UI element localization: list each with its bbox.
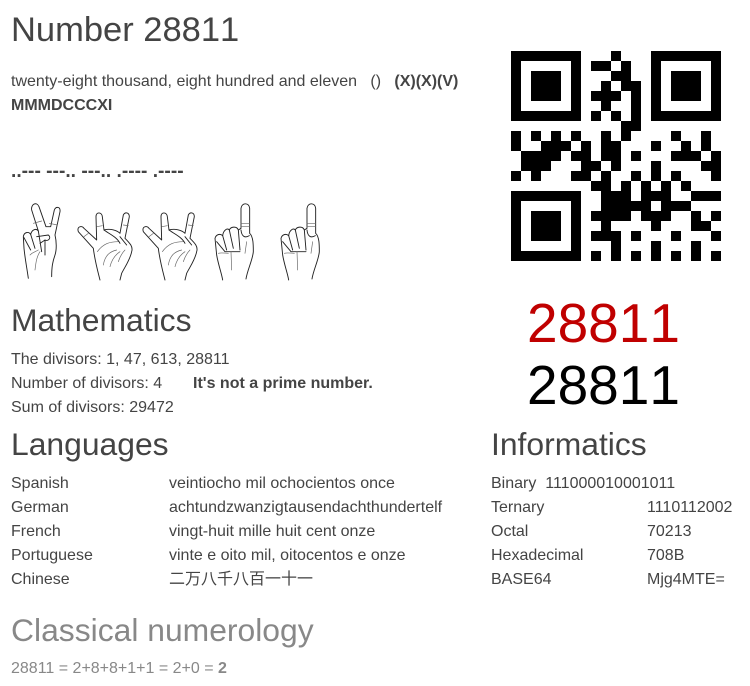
informatics table: 708B bbox=[647, 547, 684, 564]
informatics table: Octal bbox=[491, 523, 528, 540]
number in words and roman numeral: MMMDCCCXI bbox=[11, 97, 112, 114]
heading: Classical numerology: Classical numerology bbox=[11, 612, 314, 648]
red number image: 28811 bbox=[527, 292, 680, 354]
hand: one bbox=[281, 204, 319, 280]
languages table: Spanish bbox=[11, 475, 69, 492]
informatics table: Binary 111000010001011 bbox=[491, 475, 675, 492]
languages table bbox=[11, 475, 442, 588]
informatics table: BASE64 bbox=[491, 571, 551, 588]
mathematics facts: It's not a prime number. bbox=[193, 375, 373, 392]
QR code bbox=[511, 51, 721, 261]
heading: Informatics: Informatics bbox=[491, 426, 647, 462]
mathematics facts: Number of divisors: 4 bbox=[11, 375, 162, 392]
languages table: achtundzwanzigtausendachthundertelf bbox=[169, 499, 442, 516]
informatics table: Ternary bbox=[491, 499, 544, 516]
languages table: veintiocho mil ochocientos once bbox=[169, 475, 395, 492]
languages table: vingt-huit mille huit cent onze bbox=[169, 523, 375, 540]
languages table: German bbox=[11, 499, 69, 516]
black number image: 28811 bbox=[527, 354, 680, 416]
title: Number 28811 bbox=[11, 11, 239, 49]
informatics table: 70213 bbox=[647, 523, 692, 540]
morse code: ..--- ---.. ---.. .---- .---- bbox=[11, 161, 184, 182]
hand: two bbox=[23, 204, 60, 278]
sign language hands bbox=[22, 203, 320, 280]
mathematics facts: Sum of divisors: 29472 bbox=[11, 399, 174, 416]
heading: Languages: Languages bbox=[11, 426, 169, 462]
languages table: Portuguese bbox=[11, 547, 93, 564]
languages table: 二万八千八百一十一 bbox=[169, 571, 313, 588]
number in words and roman numeral: twenty-eight thousand, eight hundred and eleven () (X)(X)(V) bbox=[11, 73, 458, 90]
informatics table: Hexadecimal bbox=[491, 547, 583, 564]
number in words and roman numeral bbox=[11, 73, 458, 114]
hand: eight bbox=[143, 213, 197, 280]
hand: eight bbox=[78, 213, 132, 280]
languages table: French bbox=[11, 523, 61, 540]
languages table: vinte e oito mil, oitocentos e onze bbox=[169, 547, 406, 564]
numerology calculation: 28811 = 2+8+8+1+1 = 2+0 = 2 bbox=[11, 660, 227, 677]
heading: Mathematics: Mathematics bbox=[11, 302, 192, 338]
languages table: Chinese bbox=[11, 571, 70, 588]
mathematics facts bbox=[11, 351, 373, 416]
informatics table: Mjg4MTE= bbox=[647, 571, 725, 588]
informatics table: 1110112002 bbox=[647, 499, 732, 516]
informatics table bbox=[491, 475, 732, 588]
hand: one bbox=[215, 204, 253, 280]
mathematics facts: The divisors: 1, 47, 613, 28811 bbox=[11, 351, 230, 368]
